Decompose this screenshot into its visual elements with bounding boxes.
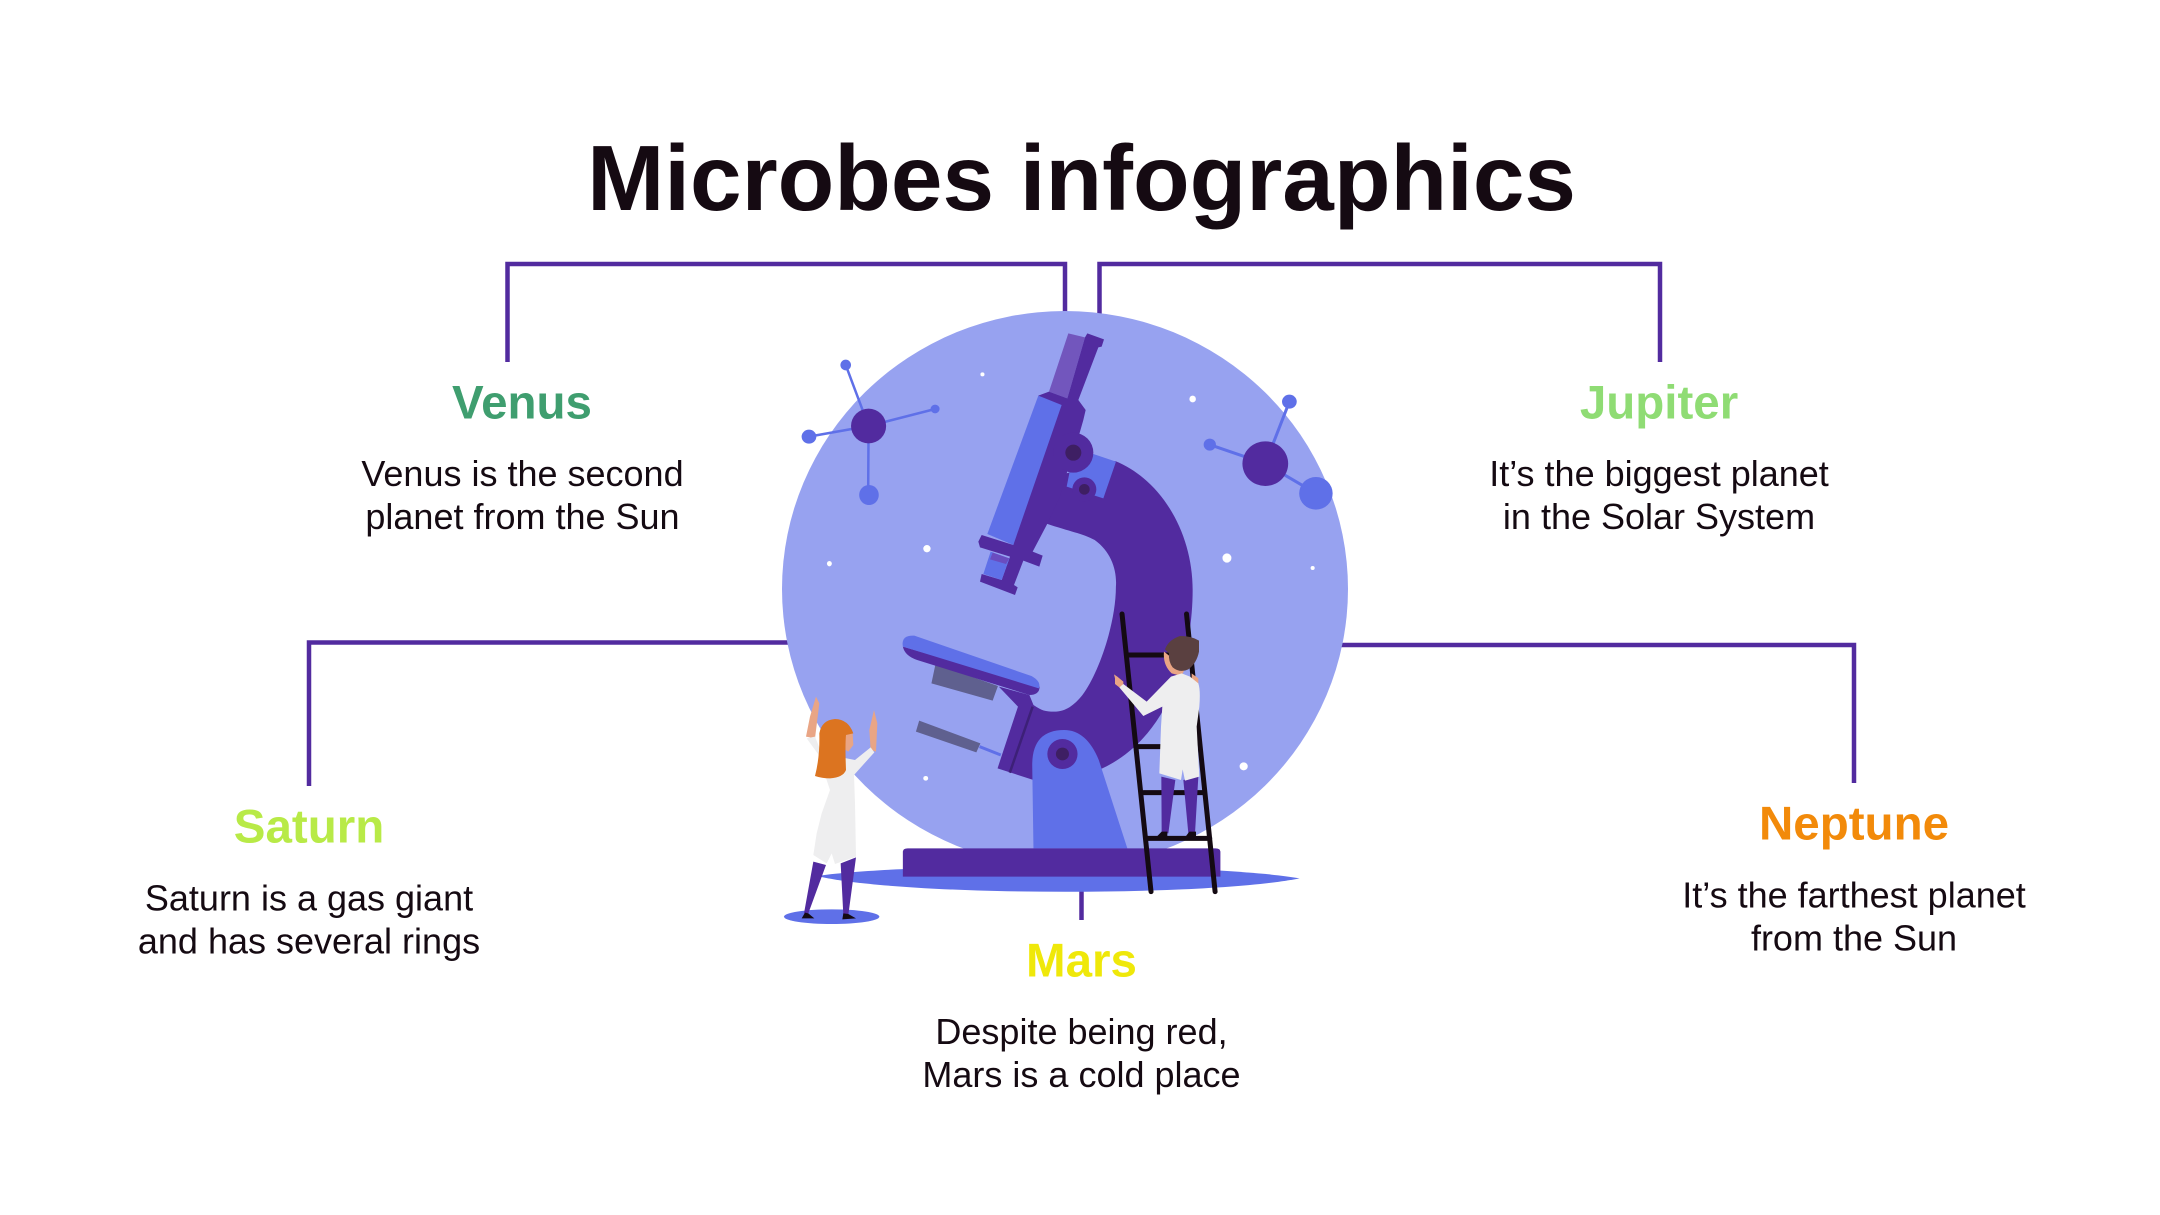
foot knob xyxy=(1047,739,1078,769)
block: Saturn xyxy=(138,800,480,962)
lab coat xyxy=(1119,673,1200,781)
text: Saturn description: Saturn is a gas giant xyxy=(145,878,473,918)
base xyxy=(903,848,1220,877)
hair xyxy=(815,719,853,778)
connector: Mars xyxy=(1079,880,1084,920)
text: Neptune description: It’s the farthest planet xyxy=(1682,874,2026,916)
scientist on floor xyxy=(784,697,879,924)
legs xyxy=(1161,777,1198,833)
block: Jupiter xyxy=(1489,376,1829,537)
upper illustration: molecules and arm xyxy=(802,360,1333,781)
ladder xyxy=(1122,614,1215,892)
background circle xyxy=(782,311,1348,867)
icon: right molecule xyxy=(1204,395,1333,510)
eyepiece xyxy=(1049,333,1085,398)
text: Jupiter description: in the Solar System xyxy=(1503,496,1815,537)
microscope arm xyxy=(998,461,1193,780)
shoes xyxy=(1156,832,1196,837)
lower gray block xyxy=(916,721,980,752)
decorative white dots xyxy=(827,372,1315,781)
text: Mars description: Mars is a cold place xyxy=(922,1054,1241,1095)
text: Saturn description: and has several rings xyxy=(138,920,480,962)
tube body xyxy=(978,333,1104,595)
foot knob centre xyxy=(1056,748,1069,760)
shoes xyxy=(802,913,856,919)
floor shadow xyxy=(784,909,879,924)
text: Neptune description: from the Sun xyxy=(1751,918,1957,958)
text: Venus description: Venus is the second xyxy=(361,453,684,494)
block: Mars xyxy=(922,934,1241,1095)
block: Neptune xyxy=(1682,798,2026,958)
thin rod xyxy=(980,747,1001,755)
block: Venus xyxy=(361,376,684,537)
legs xyxy=(804,857,856,915)
small knob xyxy=(1072,477,1096,501)
stage top xyxy=(903,636,1039,688)
stage underside xyxy=(903,647,1040,695)
lab coat xyxy=(807,737,874,864)
text: Mars description: Despite being red, xyxy=(935,1011,1228,1052)
connector: Saturn xyxy=(309,642,800,786)
ground shadow xyxy=(817,866,1300,892)
skin xyxy=(1114,652,1198,687)
text: Venus description: planet from the Sun xyxy=(365,496,680,537)
connector: Jupiter xyxy=(1100,264,1660,362)
heading: Venus: Venus xyxy=(452,376,592,430)
objective band xyxy=(990,553,1009,564)
heading: Saturn: Saturn xyxy=(234,800,384,854)
heading: Mars: Mars xyxy=(1026,934,1137,988)
illustration: microscope and scientists xyxy=(782,311,1348,924)
face xyxy=(845,733,853,752)
small knob centre xyxy=(1079,484,1090,495)
gray stage clip xyxy=(931,664,998,701)
heading: Neptune: Neptune xyxy=(1759,798,1949,850)
lower arm seam xyxy=(1010,707,1033,773)
blue plate on neck xyxy=(1067,454,1116,498)
objective lens xyxy=(983,552,1009,580)
tube front xyxy=(987,396,1062,545)
heading: Jupiter: Jupiter xyxy=(1580,376,1738,430)
hair xyxy=(1165,636,1199,671)
microscope head xyxy=(978,333,1116,595)
scientist on ladder xyxy=(1114,636,1200,837)
arms xyxy=(806,697,877,752)
large knob centre xyxy=(1065,445,1081,461)
text: Jupiter description: It’s the biggest planet xyxy=(1489,453,1829,494)
connector: Venus xyxy=(508,264,1065,362)
title: Microbes infographics xyxy=(587,126,1576,230)
large knob xyxy=(1053,433,1093,473)
icon: left molecule xyxy=(802,360,940,505)
connector: Neptune xyxy=(1330,645,1854,783)
microscope foot xyxy=(1032,730,1127,848)
lower illustration: stage, foot and base xyxy=(817,614,1300,892)
